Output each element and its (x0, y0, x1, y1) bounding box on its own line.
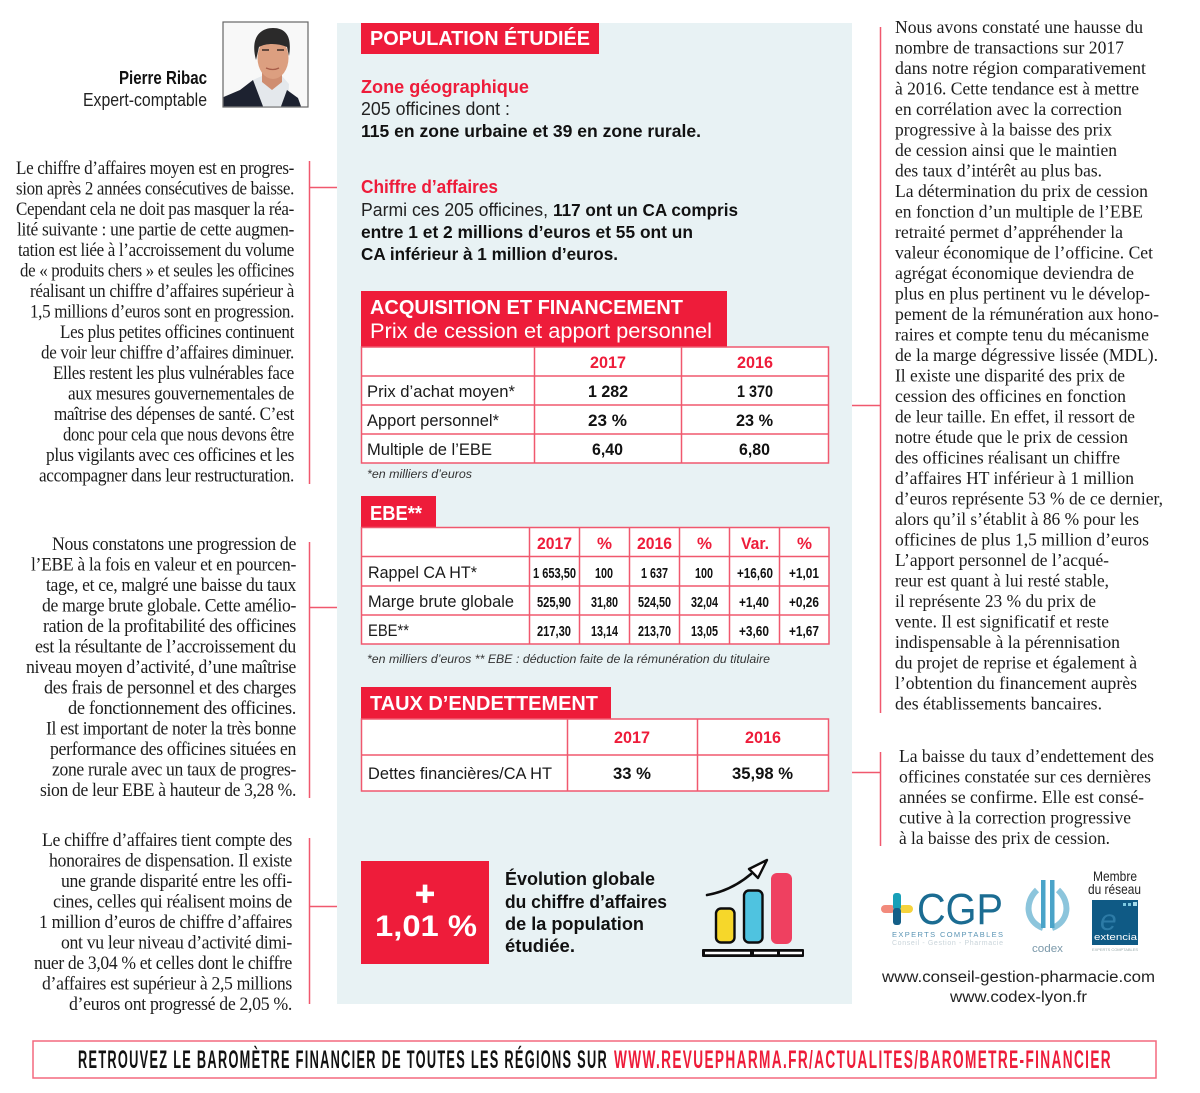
table: EBE: 2017 (537, 534, 572, 553)
table: EBE: 2016 (637, 534, 672, 553)
table: EBE: EBE** (368, 621, 409, 640)
logo: membre du réseau extencia: EXPERTS COMPTABLES (1092, 947, 1138, 952)
left text: EBE: Il est important de noter la très bonne (46, 720, 296, 740)
left text: honoraires: nuer de 3,04 % et celles dont le chiffre (34, 954, 292, 974)
logo: codex (1029, 880, 1066, 955)
right text: transactions et prix de cession: agrégat économique deviendra de (895, 263, 1134, 283)
left text: chiffre d'affaires moyen: accompagner dans leur restructuration. (39, 466, 294, 486)
right text: transactions et prix de cession: Il existe une disparité des prix de (895, 366, 1125, 386)
left text: EBE: zone rurale avec un taux de progres- (52, 760, 296, 780)
table: prix de cession et apport personnel (362, 347, 828, 463)
table: EBE: +3,60 (739, 624, 769, 640)
right text: transactions et prix de cession: il représente 23 % du prix de (895, 591, 1096, 611)
logo: membre du réseau extencia: Membre (1093, 868, 1137, 884)
table: EBE: 100 (595, 566, 613, 582)
heading: EBE: EBE** (370, 503, 422, 525)
websites (881, 969, 1155, 1006)
logo: membre du réseau extencia: du réseau (1088, 881, 1141, 897)
heading: taux d'endettement (361, 687, 611, 719)
table: taux d'endettement: 33 % (613, 764, 651, 783)
text: évolution globale: étudiée. (505, 935, 575, 956)
table: prix de cession et apport personnel: 6,80 (739, 440, 770, 459)
text: chiffre d'affaires (361, 176, 738, 264)
table: EBE: 100 (695, 566, 713, 582)
right text: transactions et prix de cession: progressive à la baisse des prix (895, 120, 1112, 140)
table: prix de cession et apport personnel: 6,40 (592, 440, 623, 459)
table: prix de cession et apport personnel: Prix d’achat moyen* (367, 382, 515, 401)
text: évolution globale: Évolution globale (505, 868, 655, 889)
text: chiffre d'affaires: Chiffre d’affaires (361, 176, 498, 197)
right text: transactions et prix de cession: de leur taille. En effet, il ressort de (895, 406, 1135, 426)
left text: EBE: sion de leur EBE à hauteur de 3,28 %. (40, 781, 296, 801)
right text: taux d'endettement: cutive à la correction progressive (899, 808, 1131, 828)
table: prix de cession et apport personnel: 2016 (737, 353, 773, 372)
heading: acquisition et financement: Prix de cession et apport personnel (370, 320, 712, 343)
right text: transactions et prix de cession: des officines réalisant un chiffre (895, 448, 1120, 468)
table: prix de cession et apport personnel: 1 282 (588, 382, 628, 401)
right text: transactions et prix de cession: d’affaires HT inférieur à 1 million (895, 468, 1134, 488)
table: prix de cession et apport personnel: 1 370 (737, 382, 773, 401)
logo: CGP: EXPERTS COMPTABLES (892, 930, 1003, 939)
author name and role (83, 68, 207, 110)
logo: membre du réseau extencia (1088, 868, 1141, 952)
table: EBE: 1 653,50 (533, 566, 576, 582)
websites: www.conseil-gestion-pharmacie.com (881, 969, 1155, 986)
left text: EBE: Nous constatons une progression de (52, 535, 296, 555)
right text: transactions et prix de cession: L’apport personnel de l’acqué- (895, 550, 1109, 570)
connector: honoraires to panel (310, 838, 337, 1004)
heading: acquisition et financement (361, 291, 727, 347)
left text: chiffre d'affaires moyen: de « produits chers » et seules les officines (20, 262, 294, 282)
text: zone géographique: Zone géographique (361, 76, 529, 97)
connector: EBE to panel (310, 542, 337, 798)
left text: EBE: des frais de personnel et des charges (44, 678, 296, 698)
table: prix de cession et apport personnel: 23 % (736, 411, 773, 430)
heading: EBE (361, 496, 436, 527)
right text: transactions et prix de cession: des taux d’intérêt au plus bas. (895, 160, 1102, 180)
text: évolution globale: de la population (505, 913, 644, 934)
left text: chiffre d'affaires moyen (16, 159, 295, 486)
table: EBE: % (697, 534, 712, 553)
left text: chiffre d'affaires moyen: Les plus petites officines continuent (60, 323, 295, 343)
heading: acquisition et financement: ACQUISITION ET FINANCEMENT (370, 297, 683, 319)
left text: chiffre d'affaires moyen: lité suivante : une partie de cette augmen- (17, 220, 294, 240)
left text: chiffre d'affaires moyen: tation est liée à l’accroissement du volume (18, 241, 294, 261)
footnote: EBE: *en milliers d’euros ** EBE : déduction faite de la rémunération du titulaire (367, 654, 770, 666)
table: taux d'endettement: 35,98 % (732, 764, 793, 783)
logo: membre du réseau extencia: e (1100, 904, 1117, 937)
right text: transactions et prix de cession: de cession ainsi que le maintien (895, 140, 1117, 160)
table: prix de cession et apport personnel: Multiple de l’EBE (367, 440, 492, 459)
right text: transactions et prix de cession (895, 17, 1163, 714)
connector: chiffre d'affaires to panel (310, 161, 337, 484)
author portrait (223, 22, 308, 107)
table: EBE: +1,01 (789, 566, 819, 582)
left text: honoraires: ont vu leur niveau d’activité dimi- (61, 934, 292, 954)
left text: chiffre d'affaires moyen: Le chiffre d’affaires moyen est en progres- (16, 159, 294, 179)
table: prix de cession et apport personnel: Apport personnel* (367, 411, 499, 430)
central panel (337, 23, 852, 1004)
table: prix de cession et apport personnel: 2017 (590, 353, 626, 372)
left text: EBE: performance des officines situées en (50, 740, 296, 760)
table: EBE: Marge brute globale (368, 592, 514, 611)
right text: transactions et prix de cession: officines de plus 1,5 million d’euros (895, 530, 1149, 550)
right text: transactions et prix de cession: des établissements bancaires. (895, 694, 1102, 714)
icon: rising bar chart with arrow (702, 860, 804, 957)
heading: taux d'endettement: TAUX D’ENDETTEMENT (370, 693, 598, 715)
table: EBE: 524,50 (638, 595, 671, 611)
callout: +1,01 %: 1,01 % (375, 910, 477, 943)
table: EBE: +16,60 (737, 566, 773, 582)
right text: transactions et prix de cession: plus en plus pertinent vu le dévelop- (895, 284, 1150, 304)
table: EBE: 525,90 (537, 595, 571, 611)
left text: EBE: de fonctionnement des officines. (68, 699, 296, 719)
left text: honoraires: honoraires de dispensation. Il existe (49, 852, 292, 872)
right text: taux d'endettement: La baisse du taux d’endettement des (899, 746, 1154, 766)
left text: honoraires (34, 831, 292, 1015)
right text: transactions et prix de cession: valeur économique de l’officine. Cet (895, 242, 1153, 262)
right text: transactions et prix de cession: pement de la rémunération aux hono- (895, 304, 1159, 324)
text: zone géographique: 205 officines dont : (361, 99, 510, 119)
heading: population étudiée (361, 23, 599, 54)
right text: transactions et prix de cession: raires et compte tenu du mécanisme (895, 324, 1149, 344)
left text: chiffre d'affaires moyen: aux mesures gouvernementales de (68, 384, 294, 404)
text: zone géographique: 115 en zone urbaine et 39 en zone rurale. (361, 121, 701, 141)
right text: transactions et prix de cession: reur est quant à lui resté stable, (895, 570, 1109, 590)
right text: transactions et prix de cession: indispensable à la pérennisation (895, 632, 1120, 652)
table: EBE: % (597, 534, 612, 553)
table: taux d'endettement (362, 719, 828, 791)
left text: EBE: niveau moyen d’activité, d’une maîtrise (26, 658, 296, 678)
right text: transactions et prix de cession: d’euros représente 53 % de ce dernier, (895, 488, 1163, 508)
left text: honoraires: 1 million d’euros de chiffre d’affaires (39, 913, 292, 933)
right text: taux d'endettement (899, 746, 1154, 848)
left text: EBE: de marge brute globale. Cette amélio- (42, 596, 296, 616)
left text: chiffre d'affaires moyen: maîtrise des dépenses de santé. C’est (54, 405, 295, 425)
left text: EBE: ration de la profitabilité des officines (43, 617, 296, 637)
table: EBE: 32,04 (691, 595, 718, 611)
left text: EBE: tage, et ce, malgré une baisse du taux (46, 576, 297, 596)
text: chiffre d'affaires: 117 ont un CA compris (553, 200, 738, 220)
left text: chiffre d'affaires moyen: plus vigilants avec ces officines et les (46, 446, 294, 466)
text: zone géographique (361, 76, 701, 141)
logo: CGP: CGP (917, 885, 1003, 934)
banner: baromètre financier (33, 1041, 1156, 1078)
right text: transactions et prix de cession: l’obtention du financement auprès (895, 673, 1137, 693)
callout: +1,01 %: + (415, 875, 435, 913)
left text: chiffre d'affaires moyen: 1,5 millions d’euros sont en progression. (30, 302, 294, 322)
table: EBE: 31,80 (591, 595, 618, 611)
left text: chiffre d'affaires moyen: Cependant cela ne doit pas masquer la réa- (16, 200, 294, 220)
left text: honoraires: d’euros ont progressé de 2,05 %. (69, 995, 292, 1015)
right text: transactions et prix de cession: du projet de reprise et également à (895, 652, 1137, 672)
right text: taux d'endettement: années se confirme. Elle est consé- (899, 787, 1144, 807)
left text: chiffre d'affaires moyen: réalisant un chiffre d’affaires supérieur à (30, 282, 294, 302)
author name and role: Expert-comptable (83, 90, 207, 110)
right text: transactions et prix de cession: en corrélation avec la correction (895, 99, 1122, 119)
heading: population étudiée: POPULATION ÉTUDIÉE (370, 27, 590, 50)
left text: chiffre d'affaires moyen: donc pour cela que nous devons être (63, 426, 294, 446)
table: EBE: 1 637 (641, 566, 668, 582)
table: EBE: 13,05 (691, 624, 718, 640)
left text: honoraires: d’affaires est supérieur à 2,5 millions (42, 974, 292, 994)
table: EBE: 217,30 (537, 624, 571, 640)
author name and role: Pierre Ribac (119, 68, 207, 88)
websites: www.codex-lyon.fr (949, 989, 1087, 1006)
right text: transactions et prix de cession: nombre de transactions sur 2017 (895, 38, 1124, 58)
left text: chiffre d'affaires moyen: de voir leur chiffre d’affaires diminuer. (41, 344, 294, 364)
table: EBE (362, 527, 829, 644)
right text: transactions et prix de cession: à 2016. Cette tendance est à mettre (895, 78, 1139, 98)
table: taux d'endettement: Dettes financières/CA HT (368, 765, 552, 783)
left text: EBE: l’EBE à la fois en valeur et en pourcen- (31, 556, 296, 576)
right text: transactions et prix de cession: alors qu’il s’établit à 86 % pour les (895, 509, 1139, 529)
right text: transactions et prix de cession: vente. Il est significatif et reste (895, 612, 1109, 632)
table: EBE: +1,67 (789, 624, 819, 640)
table: taux d'endettement: 2016 (745, 728, 781, 747)
table: EBE: % (797, 534, 812, 553)
right text: transactions et prix de cession: Nous avons constaté une hausse du (895, 17, 1143, 37)
left text: EBE (26, 535, 297, 801)
table: EBE: Var. (741, 534, 769, 553)
logo: membre du réseau extencia: extencia (1094, 932, 1138, 943)
right text: transactions et prix de cession: retraité permet d’appréhender la (895, 222, 1123, 242)
right text: transactions et prix de cession: de la marge dégressive lissée (MDL). (895, 345, 1158, 366)
logo: codex: codex (1032, 943, 1064, 955)
text: évolution globale: du chiffre d’affaires (505, 891, 667, 912)
text: chiffre d'affaires: entre 1 et 2 millions d’euros et 55 ont un (361, 222, 693, 242)
text: chiffre d'affaires: Parmi ces 205 officines, (361, 200, 548, 220)
right text: taux d'endettement: à la baisse des prix de cession. (899, 828, 1110, 848)
right text: taux d'endettement: officines constatée sur ces dernières (899, 766, 1151, 786)
right text: transactions et prix de cession: notre étude que le prix de cession (895, 427, 1128, 447)
right text: transactions et prix de cession: cession des officines en fonction (895, 386, 1126, 406)
table: EBE: +0,26 (789, 595, 819, 611)
left text: chiffre d'affaires moyen: Elles restent les plus vulnérables face (53, 364, 294, 384)
table: EBE: +1,40 (739, 595, 769, 611)
left text: EBE: est la résultante de l’accroissement du (35, 638, 296, 658)
table: prix de cession et apport personnel: 23 % (588, 411, 627, 430)
connector: endettement text to panel (852, 752, 880, 846)
left text: honoraires: Le chiffre d’affaires tient compte des (42, 831, 292, 851)
right text: transactions et prix de cession: en fonction d’un multiple de l’EBE (895, 202, 1143, 222)
table: taux d'endettement: 2017 (614, 728, 650, 747)
right text: transactions et prix de cession: dans notre région comparativement (895, 58, 1146, 78)
table: EBE: 213,70 (638, 624, 671, 640)
logo: CGP (881, 885, 1003, 947)
connector: right text to panel (852, 27, 880, 713)
banner: baromètre financier: RETROUVEZ LE BAROMÈTRE FINANCIER DE TOUTES LES RÉGIONS SUR (78, 1045, 608, 1074)
footnote: milliers d'euros: *en milliers d’euros (367, 469, 472, 481)
right text: transactions et prix de cession: La détermination du prix de cession (895, 181, 1148, 201)
left text: honoraires: cines, celles qui réalisent moins de (53, 892, 292, 912)
table: EBE: Rappel CA HT* (368, 563, 477, 582)
table: EBE: 13,14 (591, 624, 618, 640)
text: évolution globale (505, 868, 667, 956)
left text: honoraires: une grande disparité entre les offi- (61, 872, 292, 892)
text: chiffre d'affaires: CA inférieur à 1 million d’euros. (361, 244, 618, 264)
logo: CGP: Conseil - Gestion - Pharmacie (892, 940, 1003, 947)
callout: +1,01 % (361, 861, 489, 964)
left text: chiffre d'affaires moyen: sion après 2 années consécutives de baisse. (16, 180, 294, 200)
